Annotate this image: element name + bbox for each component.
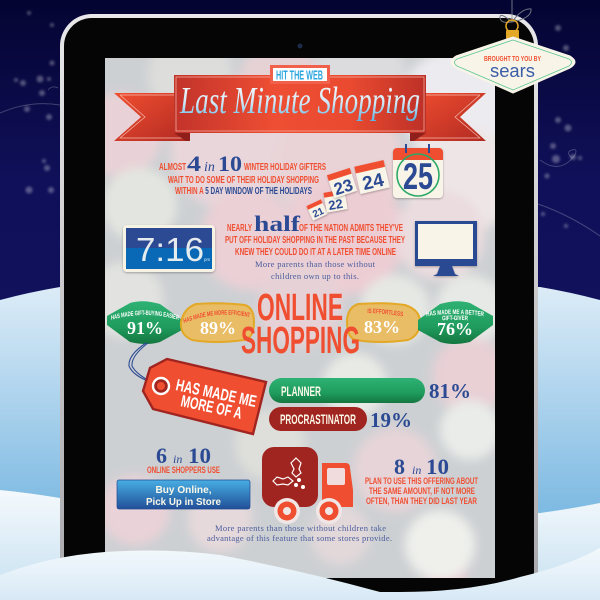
stat: 8 in 10 — [365, 454, 478, 506]
bar: planner 81%: 81% — [429, 379, 471, 403]
snow hill middle — [0, 490, 600, 600]
stat: 4 in 10: WINTER HOLIDAY GIFTERS — [244, 162, 326, 173]
calendar 25: 25 — [403, 156, 433, 197]
badge: 89%: HAS MADE ME MORE EFFICIENT — [183, 310, 250, 324]
calendars — [306, 144, 443, 222]
snow hill front — [0, 548, 600, 600]
stat: 4 in 10: WAIT TO DO SOME OF THEIR HOLIDAY SHOPPING — [168, 175, 319, 186]
badge: 91% — [107, 301, 181, 344]
stat: 4 in 10: 4 — [187, 151, 201, 176]
badge: 76%: HAS MADE ME A BETTER — [426, 310, 484, 316]
stat: 6 in 10: ONLINE SHOPPERS USE — [147, 465, 220, 475]
title banner — [114, 65, 486, 141]
badge: 83%: 83% — [364, 317, 400, 337]
label: Hit the Web: HIT THE WEB — [276, 68, 323, 82]
stat: nearly half: NEARLY — [227, 223, 252, 234]
heading: Online Shopping — [241, 287, 360, 362]
stat: 4 in 10: in — [204, 160, 215, 175]
badge: 91%: HAS MADE GIFT-BUYING EASIER — [111, 310, 179, 320]
footnote text: advantage of this feature that some stores provide. — [207, 533, 392, 543]
footnote text — [207, 523, 392, 543]
heading: Online Shopping: ONLINE — [257, 287, 343, 329]
calendar 21: 21 — [311, 206, 326, 221]
gift tag — [129, 343, 266, 434]
icon: delivery truck — [262, 447, 353, 524]
calendar 24: 24 — [361, 170, 386, 195]
ribbon centre — [174, 75, 426, 133]
bar: planner 81%: PLANNER — [281, 383, 321, 399]
stat: 6 in 10: 6 — [156, 443, 167, 468]
badge: 76%: 76% — [437, 319, 473, 339]
sky bokeh dots and swirls — [0, 11, 600, 236]
calendar 22: 22 — [327, 196, 344, 213]
camera — [298, 44, 302, 48]
sponsor sign: Sears — [451, 0, 575, 93]
bar: procrastinator 19%: PROCRASTINATOR — [280, 411, 356, 427]
gift tag: HAS MADE ME — [174, 376, 258, 411]
tag string — [129, 343, 160, 386]
bar: procrastinator 19%: 19% — [370, 408, 412, 432]
stat: 8 in 10: THE SAME AMOUNT, IF NOT MORE — [369, 486, 475, 496]
calendar 23: 23 — [331, 175, 355, 199]
heading: Last Minute Shopping: Last Minute Shopping — [179, 80, 420, 122]
stat: nearly half: children own up to this. — [271, 271, 359, 281]
button: Buy Online, Pick Up in Store: Pick Up in Store — [146, 497, 221, 508]
stat: 4 in 10: ALMOST — [159, 162, 186, 173]
stat: 4 in 10: 10 — [218, 151, 242, 176]
bar: procrastinator 19% — [269, 407, 412, 432]
stat: 8 in 10: in — [412, 463, 421, 477]
stat: nearly half: half — [254, 211, 301, 236]
tablet body — [60, 14, 538, 600]
snow hill back — [0, 287, 600, 600]
label: Hit the Web — [270, 65, 330, 84]
stat: nearly half: OF THE NATION ADMITS THEY'VE — [299, 223, 403, 234]
gift tag: MORE OF A — [179, 392, 244, 423]
ribbon left tail — [114, 93, 190, 141]
stat: 6 in 10: 10 — [188, 443, 211, 468]
badge: 91%: 91% — [127, 318, 163, 338]
stat: 8 in 10: 8 — [394, 454, 405, 479]
stat: 8 in 10: 10 — [426, 454, 449, 479]
badge: 89%: 89% — [200, 318, 236, 338]
icon: holly — [273, 458, 305, 489]
icon: computer monitor — [415, 221, 477, 276]
footnote text: More parents than those without children take — [215, 523, 386, 533]
digital clock — [123, 225, 215, 272]
stat: 6 in 10: in — [173, 452, 182, 466]
stat: 8 in 10: OFTEN, THAN THEY DID LAST YEAR — [366, 496, 477, 506]
stat: 4 in 10 — [159, 151, 326, 197]
stat: 4 in 10: WITHIN A 5 DAY WINDOW OF THE HOLIDAYS — [175, 186, 312, 197]
stat: nearly half: PUT OFF HOLIDAY SHOPPING IN THE PAST BECAUSE THEY — [225, 235, 405, 246]
ribbon right tail — [410, 93, 486, 141]
sponsor sign: Sears: sears — [490, 61, 535, 81]
badge: 76% — [418, 301, 493, 344]
button: Buy Online, Pick Up in Store: Buy Online, — [156, 485, 212, 496]
stat: nearly half — [225, 211, 405, 281]
ornament cap and bow — [500, 0, 531, 39]
stat: nearly half: KNEW THEY COULD DO IT AT A LATER TIME ONLINE — [235, 247, 396, 258]
digital clock: 7:16 — [136, 231, 204, 268]
badge: 83% — [346, 302, 420, 343]
digital clock: pm — [204, 257, 211, 262]
button: Buy Online, Pick Up in Store — [117, 480, 250, 509]
badge: 89% — [180, 302, 255, 343]
stat: nearly half: More parents than those without — [255, 259, 376, 269]
bar: planner 81% — [269, 378, 471, 403]
sponsor sign: Sears: BROUGHT TO YOU BY — [484, 54, 541, 63]
badge: 83%: IS EFFORTLESS — [368, 308, 403, 316]
screen bokeh background — [105, 58, 495, 578]
stat: 8 in 10: PLAN TO USE THIS OFFERING ABOUT — [365, 476, 478, 486]
heading: Online Shopping: SHOPPING — [241, 320, 360, 362]
stat: 6 in 10 — [147, 443, 220, 475]
badge: 76%: GIFT-GIVER — [442, 316, 468, 320]
